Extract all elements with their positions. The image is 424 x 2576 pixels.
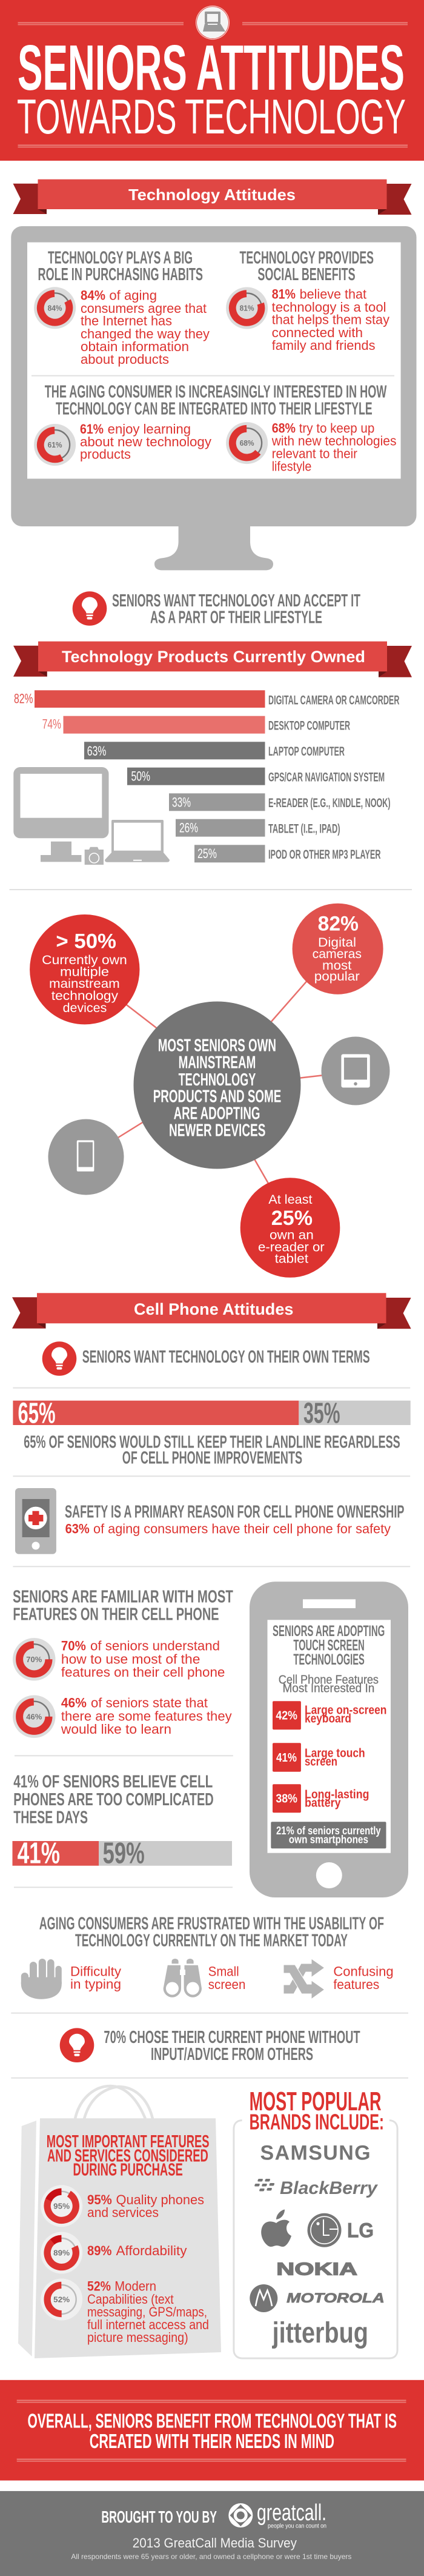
callout text: AS A PART OF THEIR LIFESTYLE (150, 608, 322, 628)
title (17, 32, 406, 144)
heading: adopting touch screen (273, 1623, 385, 1668)
heading: too complicated (13, 1773, 214, 1827)
bar: GPS 50%: 50% (131, 768, 150, 783)
text: 70% stat: of seniors understand (90, 1639, 220, 1654)
text: 46% stat: there are some features they (61, 1708, 232, 1723)
icon: bag handles (75, 2086, 153, 2119)
callout: smartphones 21%: own smartphones (289, 1833, 368, 1845)
donut 70% (13, 1638, 56, 1681)
text: 81% stat: technology is a tool (272, 300, 386, 315)
icon: light bulb (60, 2028, 94, 2062)
feature: 42% keyboard: Large on-screen (305, 1704, 386, 1717)
bar: tablet 26% (176, 819, 340, 837)
callout: seniors want technology (73, 591, 360, 628)
heading: important features: MOST IMPORTANT FEATURES (47, 2132, 210, 2152)
icon: phone with medical cross (15, 1488, 56, 1554)
donut 52% (41, 2279, 82, 2320)
text: landline statement: OF CELL PHONE IMPROVEMENTS (122, 1449, 302, 1468)
bar: laptop computer 63%: LAPTOP COMPUTER (268, 745, 345, 759)
text: 84% stat: obtain information (81, 339, 189, 354)
donut 52%: 52% (53, 2295, 70, 2304)
icon: light bulb (42, 1341, 76, 1376)
text: 81% stat: connected with (272, 325, 363, 340)
text: 46% stat: 46% (61, 1696, 87, 1711)
heading banner: Cell Phone Attitudes: Cell Phone Attitudes (134, 1300, 293, 1318)
feature: 38% battery: 38% (276, 1793, 297, 1806)
logo: Samsung: SAMSUNG (260, 2142, 371, 2165)
bubble: center message: ARE ADOPTING (174, 1104, 260, 1124)
text: 84% stat (81, 288, 210, 367)
bar: digital camera 82%: 82% (14, 691, 33, 706)
text: 70% stat: features on their cell phone (61, 1665, 225, 1680)
bar: iPod 25% (194, 845, 381, 862)
panel: monitor with technology attitudes (11, 226, 417, 570)
donut 84%: 84% (48, 303, 62, 313)
text: 84% stat: 84% (81, 288, 105, 303)
bubble: at least 25%: e-reader or (258, 1240, 325, 1254)
heading: adopting touch screen: TECHNOLOGIES (293, 1651, 365, 1668)
bubble: center message: PRODUCTS AND SOME (153, 1087, 281, 1107)
stacked bar: 41% vs 59%: 59% (103, 1837, 145, 1870)
icon: light bulb (73, 591, 107, 626)
diagram: device ownership bubbles (30, 904, 390, 1278)
donut 46%: 46% (26, 1712, 42, 1721)
stacked bar: 65% vs 35% (13, 1398, 411, 1430)
bar: tablet 26%: 26% (179, 820, 198, 836)
heading: social benefits: SOCIAL BENEFITS (257, 265, 356, 284)
text: 68% stat: relevant to their (272, 446, 357, 461)
bubble: 82% digital cameras: Digital (318, 936, 356, 950)
heading: familiar with features: FEATURES ON THEIR CELL PHONE (13, 1605, 219, 1625)
bubble: at least 25%: 25% (271, 1207, 313, 1230)
text: 81% stat: believe that (300, 287, 366, 302)
logo: BlackBerry: BlackBerry (280, 2178, 378, 2198)
heading banner: Technology Attitudes: Technology Attitudes (128, 186, 296, 204)
logo: GreatCall: greatcall. (257, 2500, 326, 2526)
donut 61%: 61% (48, 440, 62, 449)
text: 68% stat: lifestyle (272, 458, 311, 474)
bubble: more than 50%: multiple (60, 965, 109, 979)
stacked bar: 41% vs 59% (12, 1837, 232, 1870)
feature: 38% battery: battery (305, 1796, 341, 1810)
bar: digital camera 82% (14, 690, 399, 708)
text: confusing features: Confusing (333, 1964, 394, 1979)
text: 81% stat: 81% (272, 287, 296, 302)
feature: 42% keyboard: keyboard (305, 1712, 351, 1726)
text: difficulty in typing: in typing (70, 1976, 121, 1991)
donut 95% (41, 2185, 82, 2227)
heading: familiar with features (13, 1587, 233, 1625)
logo: jitterbug: jitterbug (272, 2317, 368, 2349)
header panel (0, 0, 424, 161)
text: confusing features: features (333, 1977, 379, 1992)
text: 46% stat (61, 1696, 232, 1737)
bag side (18, 2121, 36, 2356)
feature: 42% keyboard: 42% (276, 1709, 297, 1723)
bubble: 82% digital cameras: popular (314, 970, 360, 984)
text: 52% stat: full internet access and (87, 2317, 209, 2332)
icon: binoculars (164, 1959, 202, 1997)
text: 95% stat: and services (87, 2205, 159, 2220)
bar: GPS 50% (127, 768, 385, 785)
text: small screen (208, 1964, 245, 1992)
bubble: center message: TECHNOLOGY (179, 1070, 256, 1090)
text: small screen: Small (208, 1964, 239, 1979)
callout: own terms (42, 1341, 370, 1376)
conclusion text (28, 2410, 397, 2452)
stacked bar: 65% vs 35%: 65% (18, 1398, 56, 1430)
text: 95% stat (87, 2192, 204, 2220)
survey title: 2013 GreatCall Media Survey (133, 2535, 297, 2551)
bubble: center message: NEWER DEVICES (169, 1121, 265, 1140)
donut 84% (34, 287, 76, 329)
text: 89% stat (87, 2243, 187, 2258)
text: 95% stat: Quality phones (116, 2192, 204, 2207)
bar: desktop computer 74% (42, 716, 350, 734)
text: 61% stat (80, 421, 211, 462)
feature: 41% touch screen: Large touch (305, 1747, 365, 1760)
bar: laptop computer 63%: 63% (87, 743, 106, 759)
heading: important features (47, 2132, 210, 2179)
panel: popular brands (234, 2087, 397, 2358)
feature: 41% touch screen (273, 1743, 365, 1772)
donut 89% (41, 2232, 82, 2274)
text: 68% stat: try to keep up (299, 421, 374, 435)
monitor frame (11, 226, 417, 570)
stacked bar: 65% vs 35%: 35% (303, 1398, 340, 1430)
text: 70% stat: 70% (61, 1639, 86, 1654)
stacked bar: 41% vs 59%: 41% (18, 1837, 60, 1870)
callout: smartphones 21% (271, 1822, 386, 1848)
text: difficulty in typing: Difficulty (70, 1964, 121, 1979)
bubble: 82% digital cameras: most (322, 959, 352, 973)
text: 68% stat: 68% (272, 421, 296, 435)
subheading: features of interest: Cell Phone Features (279, 1674, 379, 1687)
bubble: more than 50%: devices (63, 1001, 107, 1015)
donut 68% (226, 422, 268, 464)
bubble: more than 50%: mainstream (49, 977, 120, 991)
callout text (104, 2028, 360, 2064)
heading: purchasing habits: ROLE IN PURCHASING HABITS (38, 265, 203, 284)
sponsor line: BROUGHT TO YOU BY (101, 2507, 217, 2526)
heading: purchasing habits (38, 248, 203, 284)
donut 70%: 70% (26, 1655, 42, 1664)
heading: important features: AND SERVICES CONSIDERED (47, 2146, 208, 2165)
heading banner: Technology Products Currently Owned: Technology Products Currently Owned (62, 648, 365, 666)
bubble: at least 25%: tablet (275, 1252, 308, 1266)
donut 81%: 81% (240, 303, 254, 313)
bag body (35, 2118, 221, 2358)
icon: shuffle arrows (283, 1959, 325, 1999)
text: 84% stat: consumers agree that (81, 301, 207, 316)
text: 68% stat (271, 421, 396, 474)
text: 46% stat: would like to learn (61, 1722, 171, 1737)
heading: most popular brands (250, 2087, 384, 2135)
text: 52% stat: 52% (87, 2279, 111, 2294)
text: 84% stat: changed the way they (81, 326, 210, 341)
survey note: All respondents were 65 years or older, and owned a cellphone or were 1st time buyers (71, 2552, 351, 2561)
callout text (112, 591, 360, 628)
bubble: 82% digital cameras: cameras (313, 947, 362, 961)
text: 52% stat: messaging, GPS/maps, (87, 2304, 207, 2319)
feature: 38% battery (273, 1784, 369, 1813)
donut 81% (226, 287, 268, 329)
subheading: features of interest (279, 1674, 379, 1696)
logo: GreatCall: people you can count on (268, 2523, 326, 2530)
footer panel (0, 2491, 424, 2576)
bubble: center message (133, 1002, 300, 1169)
icon: laptop badge (196, 5, 230, 39)
text: safety statement (65, 1502, 404, 1536)
bubble: more than 50%: technology (51, 989, 119, 1003)
callout: smartphones 21%: 21% of seniors currently (276, 1825, 381, 1837)
text: 95% stat: 95% (87, 2192, 112, 2207)
bubble: more than 50%: Currently own (42, 953, 127, 967)
heading: usability frustration (39, 1914, 384, 1951)
donut 46% (13, 1696, 56, 1738)
heading banner: Technology Products Currently Owned (13, 642, 412, 677)
text: 61% stat: 61% (80, 421, 104, 437)
text: 89% stat: Affordability (116, 2243, 187, 2258)
feature: 41% touch screen: 41% (276, 1751, 297, 1765)
heading banner: Cell Phone Attitudes (12, 1293, 411, 1329)
callout text: INPUT/ADVICE FROM OTHERS (151, 2045, 313, 2064)
donut 89%: 89% (53, 2249, 70, 2257)
text: 84% stat: the Internet has (81, 314, 172, 329)
bar: e-reader 33%: 33% (172, 795, 191, 810)
bubble: phone icon (48, 1119, 124, 1195)
conclusion panel (0, 2380, 424, 2480)
feature: 38% battery: Long-lasting (305, 1788, 369, 1802)
heading: social benefits (240, 248, 374, 284)
bar: desktop computer 74%: 74% (42, 717, 61, 732)
bar: iPod 25%: 25% (197, 846, 217, 861)
feature: 42% keyboard (273, 1701, 386, 1729)
text: safety statement: 63% (65, 1521, 90, 1536)
bar: desktop computer 74%: DESKTOP COMPUTER (268, 719, 350, 733)
donut 61% (34, 424, 76, 466)
text: confusing features (333, 1964, 394, 1992)
text: 70% stat (61, 1639, 225, 1680)
bubble: 82% digital cameras: 82% (318, 913, 359, 936)
feature: 41% touch screen: screen (305, 1756, 337, 1769)
text: 61% stat: about new technology (80, 434, 211, 449)
logo: Motorola (250, 2284, 385, 2312)
logo: Motorola: MOTOROLA (287, 2290, 385, 2306)
heading: aging consumer (45, 382, 387, 419)
text: 46% stat: of seniors state that (91, 1696, 208, 1711)
bubble: at least 25%: At least (268, 1193, 313, 1207)
bubble: at least 25%: own an (270, 1229, 314, 1243)
text: 52% stat: picture messaging) (87, 2330, 188, 2345)
icon: devices group (13, 767, 170, 865)
text: small screen: screen (208, 1977, 245, 1992)
heading: important features: DURING PURCHASE (73, 2160, 183, 2179)
logo: Nokia: NOKIA (276, 2260, 357, 2279)
text: 81% stat (272, 287, 389, 353)
heading: purchasing habits: TECHNOLOGY PLAYS A BIG (48, 248, 193, 267)
donut 95%: 95% (53, 2201, 70, 2211)
logo: GreatCall (228, 2500, 326, 2530)
panel: phone with touch screen features (250, 1581, 408, 1897)
text: 61% stat: products (80, 447, 131, 462)
bubble: tablet icon (321, 1037, 390, 1105)
heading: too complicated: PHONES ARE TOO COMPLICATED (13, 1790, 214, 1810)
heading: too complicated: THESE DAYS (13, 1808, 88, 1827)
text: 84% stat: of aging (109, 288, 157, 303)
subheading: features of interest: Most Interested In (282, 1682, 374, 1696)
text: 89% stat: 89% (87, 2243, 111, 2258)
text: landline statement (24, 1433, 400, 1468)
text: difficulty in typing (70, 1964, 121, 1991)
bubble: more than 50%: > 50% (56, 930, 116, 953)
bubble: 82% digital cameras (293, 904, 383, 995)
text: 61% stat: enjoy learning (108, 421, 191, 437)
panel: shopping bag with purchase features (18, 2086, 221, 2358)
logo: Apple (261, 2210, 291, 2247)
text: 68% stat: with new technologies (271, 433, 396, 448)
text: 52% stat: Capabilities (text (87, 2292, 174, 2307)
heading banner: Technology Attitudes (13, 179, 412, 215)
logo: LG: LG (347, 2219, 374, 2242)
heading: adopting touch screen: TOUCH SCREEN (293, 1637, 365, 1654)
callout: 70% chose phone alone (60, 2028, 360, 2064)
donut 68%: 68% (240, 438, 254, 448)
logo: LG (308, 2213, 374, 2247)
text: 84% stat: about products (81, 352, 169, 367)
bubble: center message: MOST SENIORS OWN (158, 1036, 276, 1055)
text: safety statement: of aging consumers have their cell phone for safety (93, 1521, 391, 1536)
bubble: center message: MAINSTREAM (179, 1053, 256, 1073)
text: 52% stat (87, 2279, 209, 2345)
text: 81% stat: that helps them stay (272, 312, 389, 327)
bar chart: products owned (14, 690, 399, 862)
bar: laptop computer 63% (84, 742, 345, 759)
text: 52% stat: Modern (114, 2279, 156, 2294)
heading: too complicated: 41% OF SENIORS BELIEVE CELL (13, 1773, 213, 1792)
bubble: more than 50% (30, 914, 139, 1024)
text: 81% stat: family and friends (272, 338, 376, 353)
text: 70% stat: how to use most of the (61, 1652, 200, 1667)
bar: tablet 26%: TABLET (I.E., IPAD) (268, 822, 340, 836)
heading: familiar with features: SENIORS ARE FAMILIAR WITH MOST (13, 1587, 233, 1606)
icon: hand (21, 1959, 62, 1999)
bubble: at least 25% (240, 1178, 340, 1278)
bar: e-reader 33% (169, 793, 391, 811)
